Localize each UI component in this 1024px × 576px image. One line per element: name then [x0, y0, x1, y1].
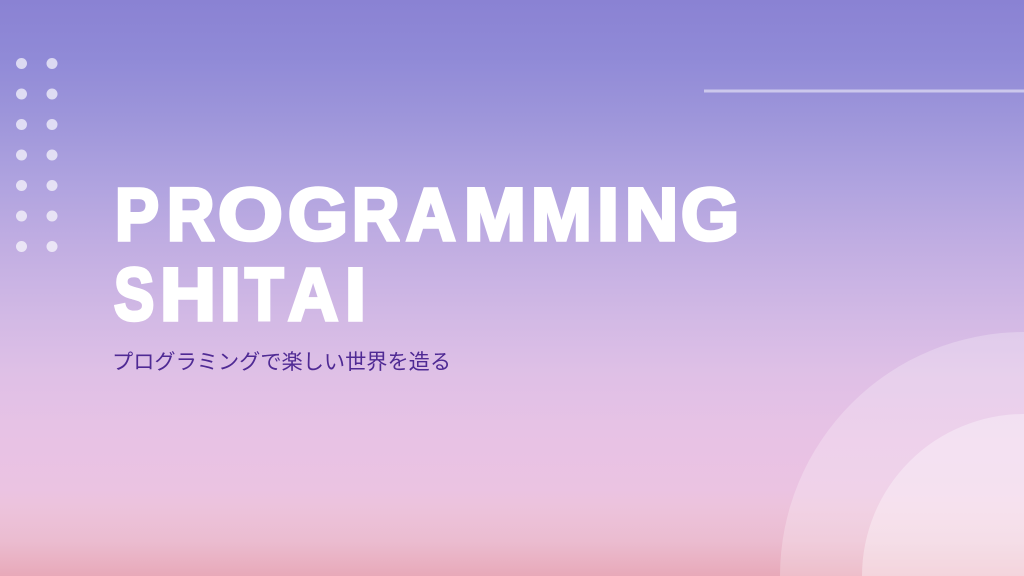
title line 1: I: [597, 172, 619, 256]
title line 1: M: [531, 172, 591, 256]
title line 1: R: [167, 172, 214, 256]
title line 1: A: [406, 172, 456, 256]
title line 2: S: [114, 253, 154, 336]
title line 1: P: [115, 172, 159, 256]
title line 2: A: [288, 253, 338, 336]
title line 1: G: [288, 172, 348, 256]
title line 2: H: [160, 253, 216, 336]
accent line: [704, 90, 1024, 92]
title line 1: [115, 172, 739, 256]
subtitle: プログラミングで楽しい世界を造る: [112, 351, 451, 374]
title line 1: G: [681, 172, 739, 256]
icon: dot grid: [16, 58, 58, 252]
title line 1: M: [464, 172, 525, 256]
title: [114, 172, 739, 336]
title line 1: R: [352, 172, 399, 256]
title line 2: I: [344, 253, 365, 336]
title line 2: I: [220, 253, 241, 336]
concentric quarter circles: [780, 332, 1024, 576]
title line 2: T: [245, 253, 283, 336]
title line 2: [114, 253, 365, 336]
title line 1: O: [218, 172, 283, 256]
title line 1: N: [625, 172, 678, 256]
